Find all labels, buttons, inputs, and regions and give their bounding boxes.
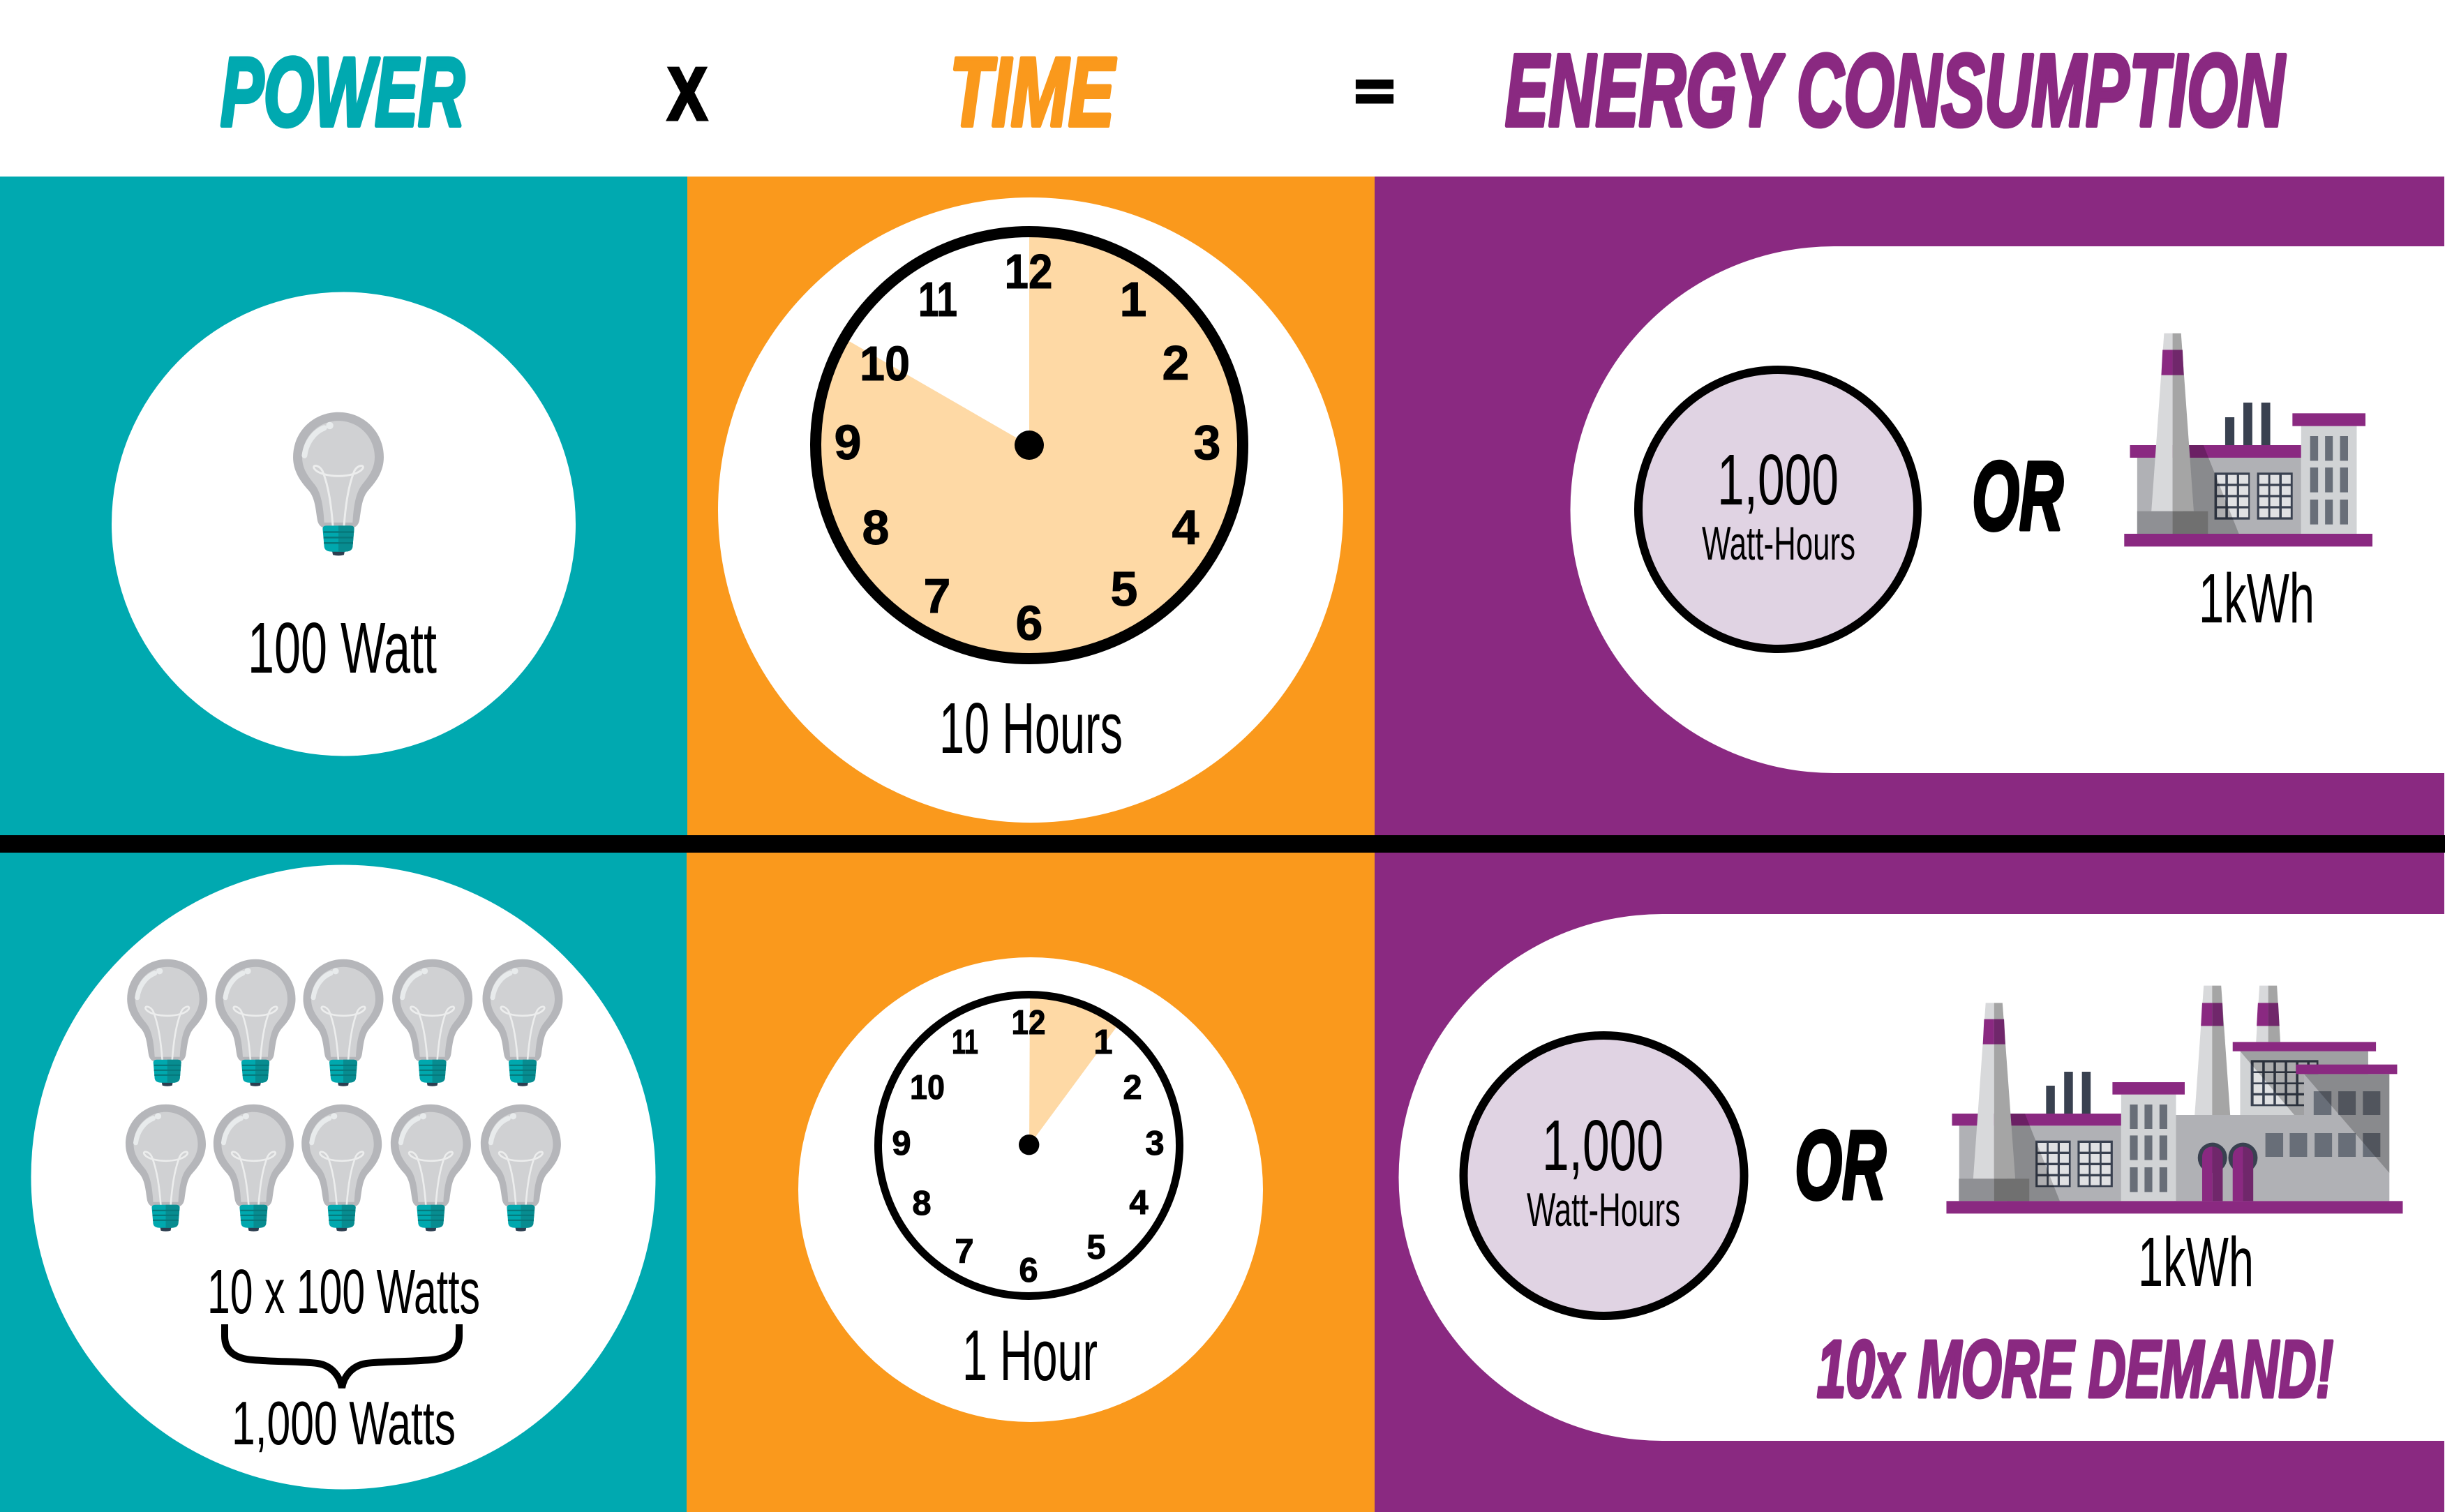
clock: 10 hours shaded: 4 <box>1172 500 1199 555</box>
label: 1kWh: 1kWh <box>2199 560 2315 638</box>
clock: 1 hour shaded: 9 <box>892 1125 911 1162</box>
clock: 10 hours shaded: 7 <box>924 569 950 623</box>
clock: 10 hours shaded: 8 <box>862 500 889 555</box>
clock: 1 hour shaded: 7 <box>955 1233 974 1271</box>
clock: 10 hours shaded: 12 <box>1005 244 1052 299</box>
clock: 10 hours shaded: 3 <box>1194 415 1220 470</box>
clock: 1 hour shaded: 3 <box>1145 1125 1165 1162</box>
panel: power, top row <box>0 177 687 836</box>
clock: 10 hours shaded <box>811 227 1248 664</box>
icon: small factory <box>2124 334 2372 546</box>
clock: 10 hours shaded: 11 <box>918 272 957 327</box>
brace <box>225 1324 459 1388</box>
label: 10 x 100 Watts: 10 x 100 Watts <box>207 1257 480 1327</box>
clock: 1 hour shaded: 4 <box>1129 1184 1149 1222</box>
clock: 10 hours shaded: 9 <box>835 415 861 470</box>
clock: 1 hour shaded: 11 <box>952 1024 978 1061</box>
icon: large factory <box>1946 986 2402 1213</box>
badge: 1,000 Watt-Hours <box>1638 370 1917 649</box>
icon: ten light bulbs <box>126 959 562 1232</box>
clock: 10 hours shaded: 1 <box>1120 272 1146 327</box>
title row: equation heading <box>220 33 2286 148</box>
panel: time, top row <box>687 177 1375 836</box>
clock: 1 hour shaded: 5 <box>1086 1229 1106 1266</box>
heading: TIME: TIME <box>950 37 1116 147</box>
panel: power, bottom row <box>0 853 687 1512</box>
operator: times: X <box>668 53 707 135</box>
panel: energy consumption, bottom row <box>1375 853 2445 1512</box>
operator: equals: = <box>1355 60 1394 121</box>
clock: 1 hour shaded: 1 <box>1093 1024 1113 1061</box>
label: 100 Watt: 100 Watt <box>248 608 437 688</box>
heading: POWER: POWER <box>220 37 465 147</box>
clock: 1 hour shaded: 10 <box>910 1069 945 1107</box>
label: 1kWh: 1kWh <box>2138 1223 2254 1301</box>
badge: 1,000 Watt-Hours: Watt-Hours <box>1702 517 1855 570</box>
clock: 1 hour shaded: 8 <box>912 1185 932 1222</box>
text: OR: OR <box>1795 1110 1886 1220</box>
badge: 1,000 Watt-Hours: 1,000 <box>1542 1105 1663 1185</box>
clock: 10 hours shaded: 2 <box>1162 336 1189 390</box>
clock: 10 hours shaded: 10 <box>860 336 910 391</box>
text: OR: OR <box>1972 441 2063 551</box>
badge: 1,000 Watt-Hours <box>1464 1035 1744 1316</box>
clock: 1 hour shaded: 12 <box>1012 1004 1045 1042</box>
clock: 1 hour shaded: 6 <box>1019 1252 1038 1289</box>
label: 10 Hours: 10 Hours <box>939 688 1123 768</box>
clock: 1 hour shaded <box>878 994 1179 1296</box>
clock: 1 hour shaded: 2 <box>1123 1069 1142 1107</box>
divider: black bar <box>0 835 2445 853</box>
clock: 10 hours shaded: 6 <box>1016 596 1042 650</box>
panel: energy consumption, top row <box>1375 177 2445 836</box>
icon: single light bulb <box>293 412 384 555</box>
badge: 1,000 Watt-Hours: Watt-Hours <box>1527 1183 1680 1236</box>
label: 1,000 Watts: 1,000 Watts <box>232 1389 456 1458</box>
panel: time, bottom row <box>687 853 1375 1512</box>
badge: 1,000 Watt-Hours: 1,000 <box>1717 440 1839 520</box>
clock: 10 hours shaded: 5 <box>1111 562 1137 616</box>
label: 1 Hour: 1 Hour <box>962 1315 1098 1395</box>
